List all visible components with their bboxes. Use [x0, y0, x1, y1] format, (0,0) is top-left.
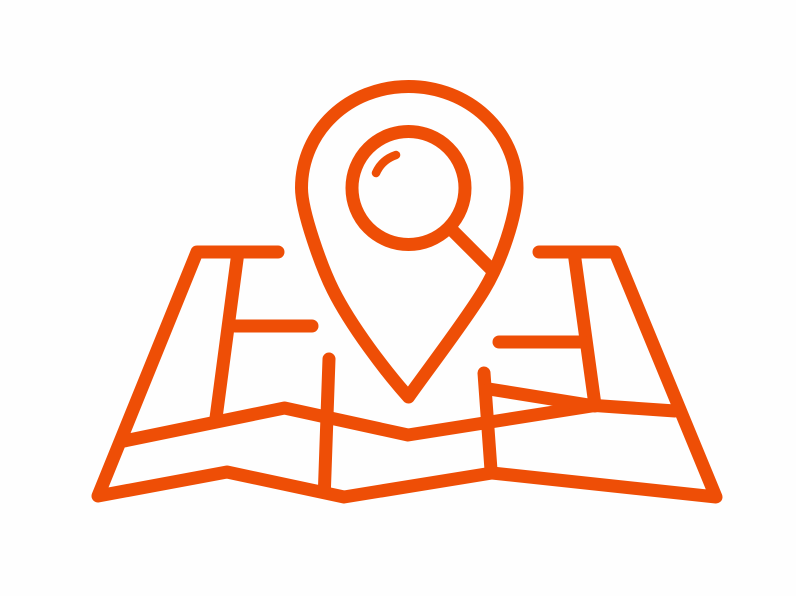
icon: magnifying glass	[352, 132, 492, 270]
icon: folded map right side	[484, 252, 595, 470]
icon: location pin	[302, 86, 517, 397]
icon: folded map left side	[98, 252, 716, 497]
